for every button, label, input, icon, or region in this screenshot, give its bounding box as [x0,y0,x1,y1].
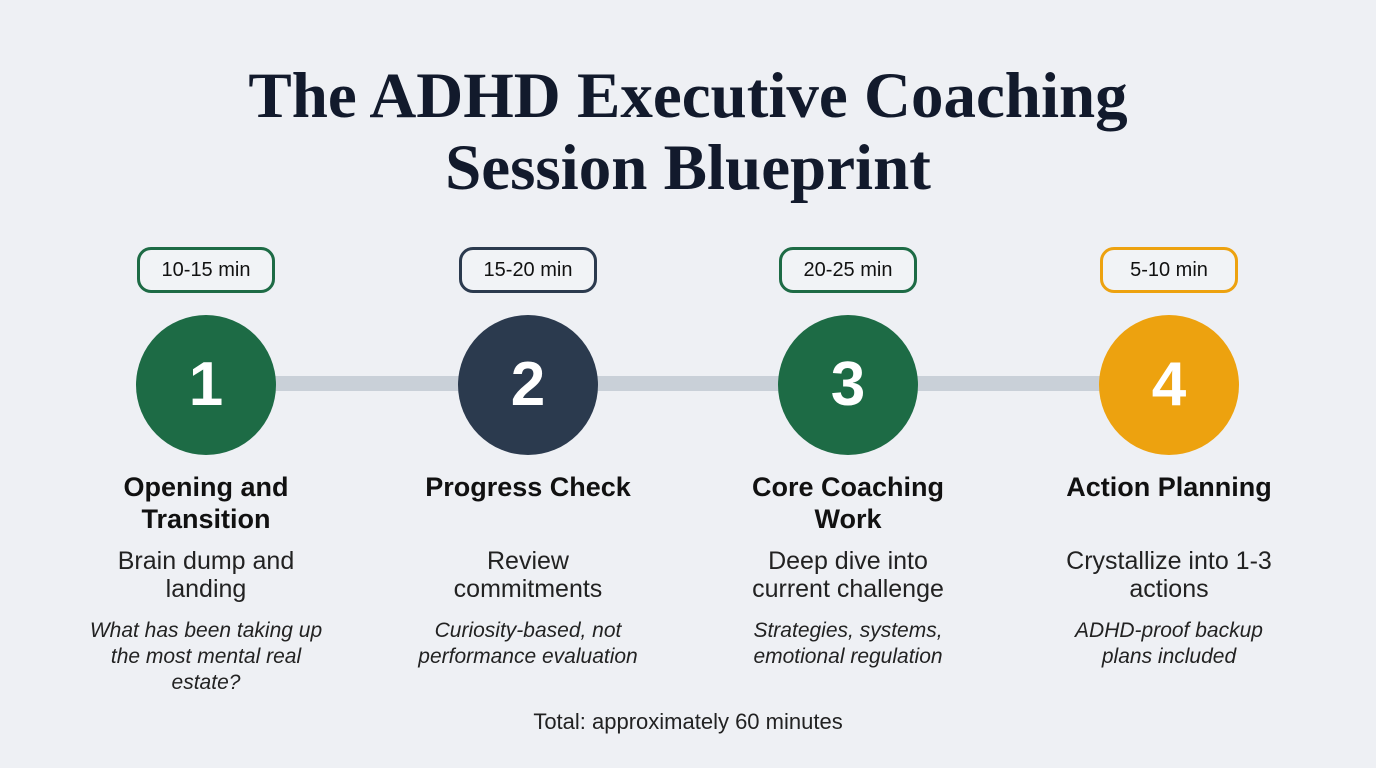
step 3 [752,247,944,668]
note: Curiosity-based, not [435,619,621,642]
circle 3 [778,315,918,455]
heading: Core Coaching [752,472,944,502]
title [248,60,1128,204]
pill: 10-15 min [137,247,275,293]
circle 2 [458,315,598,455]
title: The ADHD Executive Coaching [248,60,1128,132]
step 4 [1066,247,1272,668]
pill: 20-25 min [779,247,917,293]
heading [124,472,288,534]
pill: 15-20 min: 15-20 min [484,259,572,281]
circle 2: 2 [511,350,545,419]
description: actions [1129,575,1209,603]
note: the most mental real [111,645,301,668]
note [1074,619,1263,668]
circle 1 [136,315,276,455]
description: landing [166,575,246,603]
total footer: Total: approximately 60 minutes [533,709,843,734]
description: current challenge [752,575,944,603]
heading: Work [814,504,882,534]
heading: Action Planning [1066,472,1272,502]
circle 4: 4 [1152,350,1186,419]
description: Brain dump and [118,547,294,575]
pill: 5-10 min [1100,247,1238,293]
pill: 5-10 min: 5-10 min [1130,259,1208,281]
note [753,619,943,668]
note: estate? [172,671,240,694]
heading: Opening and [124,472,288,502]
note [418,619,638,668]
description [454,547,602,603]
note: emotional regulation [753,645,943,668]
note: Strategies, systems, [753,619,943,642]
description: commitments [454,575,602,603]
description: Review [487,547,569,575]
circle 3: 3 [831,350,865,419]
note [90,619,322,694]
note: What has been taking up [90,619,322,642]
description: Deep dive into [768,547,928,575]
timeline connector [206,376,1169,391]
note: plans included [1102,645,1236,668]
pill: 10-15 min: 10-15 min [162,259,250,281]
heading [752,472,944,534]
circle 1: 1 [189,350,223,419]
step 1 [90,247,322,694]
note: ADHD-proof backup [1075,619,1263,642]
pill: 20-25 min: 20-25 min [804,259,892,281]
description: Crystallize into 1-3 [1066,547,1272,575]
title: Session Blueprint [445,132,931,204]
heading: Transition [141,504,270,534]
description [118,547,294,603]
note: performance evaluation [418,645,638,668]
description [752,547,944,603]
description [1066,547,1272,603]
pill: 15-20 min [459,247,597,293]
circle 4 [1099,315,1239,455]
heading: Progress Check [425,472,631,502]
step 2 [418,247,638,668]
